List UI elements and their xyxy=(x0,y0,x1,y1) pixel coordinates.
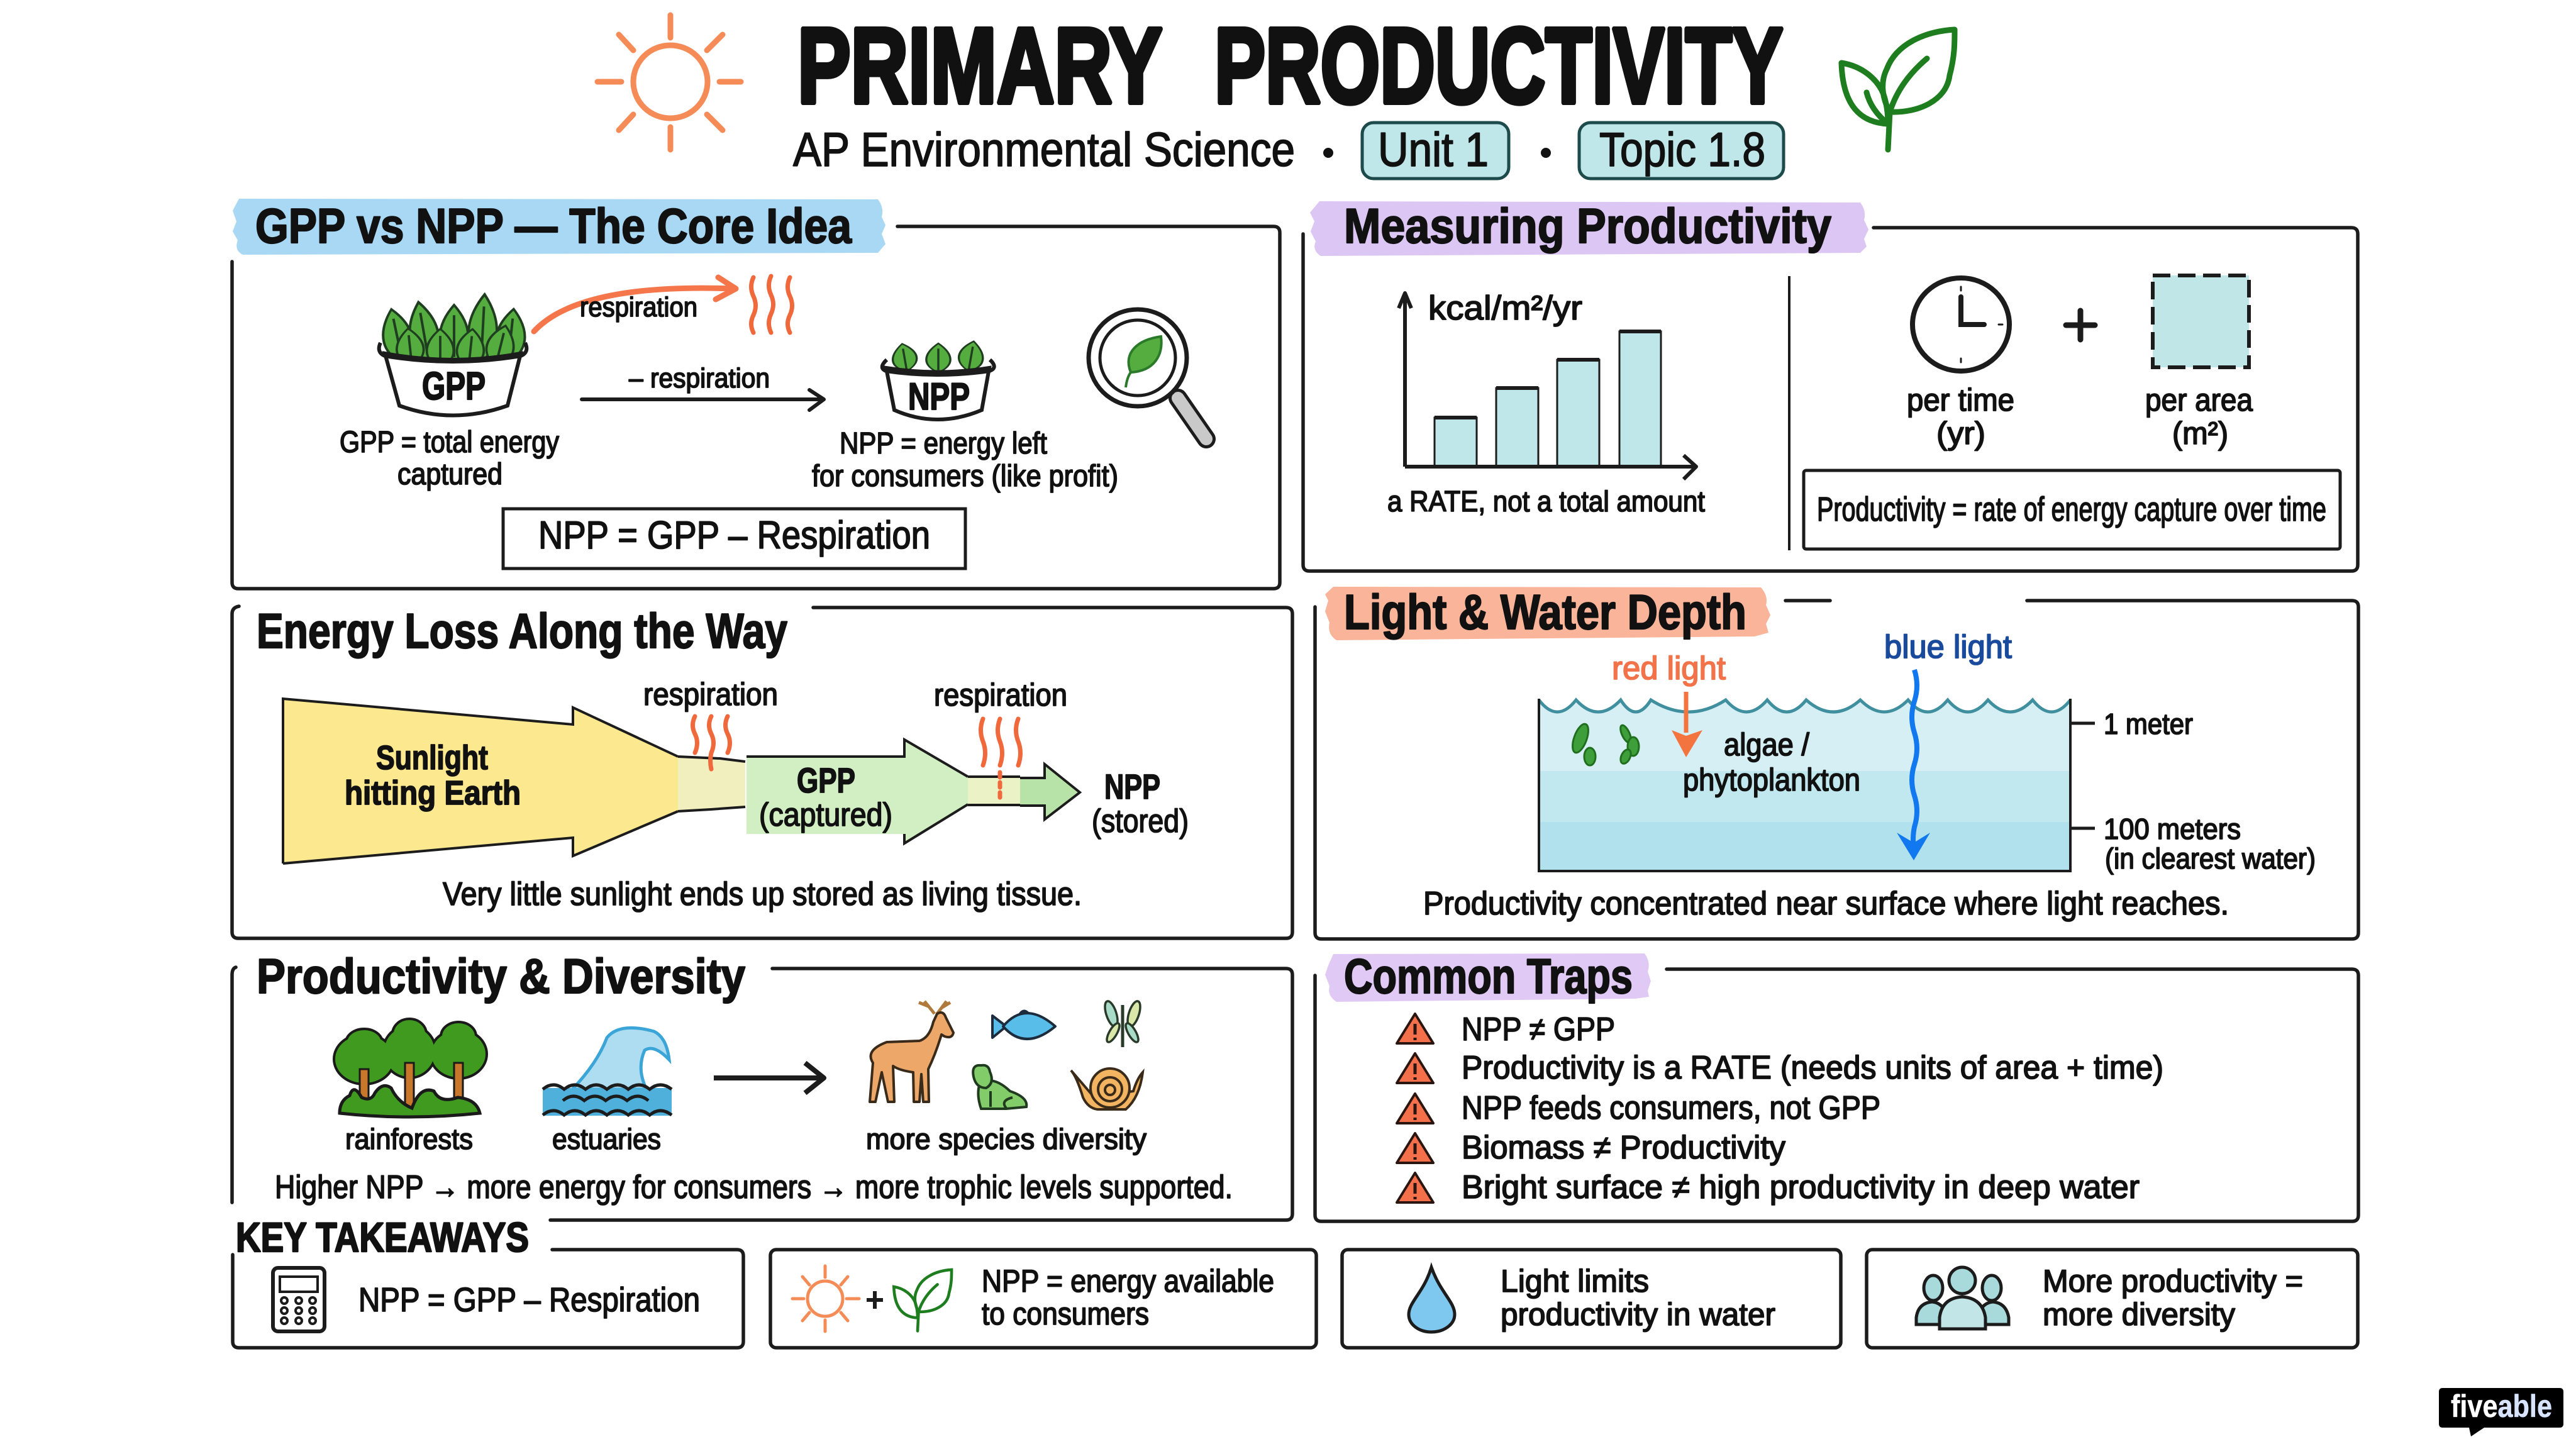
label: species diversity: more species diversity xyxy=(866,1123,1146,1155)
caption: energy loss: Very little sunlight ends up stored as living tissue. xyxy=(443,876,1082,913)
label: per area xyxy=(2145,382,2253,451)
definition box xyxy=(1804,470,2340,549)
arrow: GPP xyxy=(747,740,968,843)
arrow: sunlight xyxy=(283,699,678,863)
flow diagram xyxy=(283,677,1189,863)
label: sunlight: hitting Earth xyxy=(345,774,521,812)
icon: GPP bucket: GPP xyxy=(422,365,486,408)
card: diversity: more diversity xyxy=(2043,1297,2235,1332)
arrow: respiration loss xyxy=(534,277,736,331)
icon: clock xyxy=(1913,278,2009,371)
icon: heat squiggles xyxy=(751,276,792,333)
squiggles: respiration one xyxy=(693,716,730,769)
depth scale xyxy=(2070,708,2316,875)
connector: sunlight to GPP xyxy=(678,757,745,811)
depth scale: 1 meter xyxy=(2104,708,2193,740)
water diagram xyxy=(1539,670,2070,871)
icon: people xyxy=(1916,1267,2009,1329)
icon: algae xyxy=(1569,722,1639,765)
panel: GPP vs NPP xyxy=(232,198,1280,589)
icon: frog xyxy=(973,1065,1026,1109)
bullet xyxy=(1541,148,1551,158)
panel: common traps xyxy=(1315,948,2358,1221)
depth scale: 100 meters xyxy=(2104,813,2241,845)
card: diversity: More productivity = xyxy=(2043,1263,2303,1299)
caption: rate: a RATE, not a total amount xyxy=(1387,485,1705,518)
badge: topic 1.8: Topic 1.8 xyxy=(1599,123,1765,177)
label: estuaries: estuaries xyxy=(552,1123,661,1155)
card: formula xyxy=(233,1250,743,1348)
arrow: NPP xyxy=(1020,764,1080,819)
card: light limits: productivity in water xyxy=(1501,1297,1775,1332)
icon: dragonfly xyxy=(1102,1000,1143,1047)
trap three: NPP feeds consumers, not GPP xyxy=(1462,1090,1880,1126)
label: rainforests: rainforests xyxy=(345,1123,473,1155)
icon: GPP bucket xyxy=(377,294,528,415)
label: blue light: blue light xyxy=(1884,629,2012,665)
icon: deer xyxy=(870,1001,953,1102)
label: respiration two: respiration xyxy=(934,677,1067,713)
text: GPP definition: captured xyxy=(397,458,502,491)
heading: light and water depth: Light & Water Depth xyxy=(1344,584,1746,640)
label: NPP stored xyxy=(1092,767,1189,840)
label: red light: red light xyxy=(1612,650,1726,687)
text: GPP definition xyxy=(340,426,559,491)
label: NPP stored: (stored) xyxy=(1092,803,1189,840)
bullet xyxy=(1323,148,1333,158)
icon: NPP bucket: NPP xyxy=(908,375,970,418)
label: GPP captured: (captured) xyxy=(759,797,892,833)
icon: rainforest trees xyxy=(335,1020,486,1117)
bar chart xyxy=(1399,289,1696,479)
panel: energy loss xyxy=(232,603,1292,938)
icon: leaf xyxy=(1841,30,1955,150)
label: minus respiration: – respiration xyxy=(629,363,770,394)
icon: small sun xyxy=(792,1266,859,1331)
depth scale: (in clearest water) xyxy=(2105,842,2316,875)
icon: fish xyxy=(992,1011,1055,1039)
label: per time xyxy=(1907,382,2014,451)
logo: fiveable: fiveable xyxy=(2451,1389,2552,1424)
label: GPP captured: GPP xyxy=(797,760,855,800)
text: NPP definition: for consumers (like profit) xyxy=(812,460,1118,493)
trap five: Bright surface ≠ high productivity in deep water xyxy=(1462,1169,2140,1206)
heading: GPP vs NPP: GPP vs NPP — The Core Idea xyxy=(255,198,852,253)
card: energy to consumers: NPP = energy available xyxy=(982,1263,1274,1299)
plus sign xyxy=(2066,311,2095,340)
card: light limits: Light limits xyxy=(1501,1263,1649,1299)
icon: snail xyxy=(1071,1069,1143,1109)
card: light limits xyxy=(1342,1250,1841,1348)
label: per area: per area xyxy=(2145,382,2253,418)
label: algae: phytoplankton xyxy=(1683,762,1860,797)
squiggles: respiration two xyxy=(981,719,1020,801)
icon: sun xyxy=(597,15,741,150)
subtitle: AP Environmental Science xyxy=(793,123,1295,177)
panel: productivity and diversity xyxy=(232,948,1292,1220)
label: per time: (yr) xyxy=(1936,416,1985,451)
label: GPP captured xyxy=(759,760,892,833)
formula box xyxy=(503,509,965,569)
icon: small leaf xyxy=(894,1270,952,1331)
card: diversity xyxy=(1867,1250,2358,1348)
caption: diversity: Higher NPP → more energy for consumers → more trophic levels supported. xyxy=(275,1169,1233,1206)
card: formula: NPP = GPP – Respiration xyxy=(358,1281,700,1319)
text: GPP definition: GPP = total energy xyxy=(340,426,559,459)
label: respiration one: respiration xyxy=(643,677,778,712)
panel: light and water depth xyxy=(1315,584,2358,939)
caption: light: Productivity concentrated near surface where light reaches. xyxy=(1423,886,2229,922)
trap one: NPP ≠ GPP xyxy=(1462,1011,1615,1048)
trap two: Productivity is a RATE (needs units of area + time) xyxy=(1462,1050,2163,1086)
formula box: NPP = GPP – Respiration xyxy=(538,514,930,557)
heading: productivity and diversity: Productivity & Diversity xyxy=(257,948,745,1004)
key takeaways xyxy=(233,1214,2358,1348)
label: sunlight xyxy=(345,739,521,812)
title xyxy=(797,6,1783,126)
text: NPP definition xyxy=(812,427,1118,493)
icon: magnifier with leaf xyxy=(1089,309,1206,439)
label: per time: per time xyxy=(1907,382,2014,418)
text: NPP definition: NPP = energy left xyxy=(840,427,1047,460)
label: algae xyxy=(1683,727,1860,797)
trap list xyxy=(1397,1011,2163,1206)
logo: fiveable xyxy=(2439,1388,2563,1436)
label: per area: (m²) xyxy=(2172,416,2228,451)
heading: key takeaways: KEY TAKEAWAYS xyxy=(236,1214,529,1260)
label: NPP stored: NPP xyxy=(1104,767,1160,806)
panel: measuring productivity xyxy=(1303,198,2358,571)
icon: estuary wave xyxy=(543,1028,672,1116)
badge: unit 1: Unit 1 xyxy=(1378,123,1489,177)
arrow: blue light xyxy=(1897,670,1930,860)
header xyxy=(597,6,1955,179)
trap one xyxy=(1397,1011,1615,1048)
trap four: Biomass ≠ Productivity xyxy=(1462,1130,1785,1166)
heading: energy loss: Energy Loss Along the Way xyxy=(257,603,787,658)
icon: NPP bucket xyxy=(882,339,994,419)
card: energy to consumers xyxy=(770,1250,1316,1348)
icon: water drop xyxy=(1409,1267,1455,1332)
bar chart: kcal/m²/yr xyxy=(1428,289,1582,327)
icon: calculator xyxy=(273,1268,325,1331)
label: respiration: respiration xyxy=(580,292,697,323)
icon: dashed area square xyxy=(2153,275,2249,367)
plus sign xyxy=(867,1291,883,1309)
arrow: red light xyxy=(1672,692,1702,757)
title: PRODUCTIVITY xyxy=(1214,6,1783,126)
label: algae: algae / xyxy=(1724,727,1809,762)
title: PRIMARY xyxy=(797,6,1162,126)
arrow: leads to diversity xyxy=(714,1063,824,1093)
connector: GPP to NPP xyxy=(968,777,1020,805)
arrow: GPP to NPP xyxy=(582,390,824,410)
heading: common traps: Common Traps xyxy=(1344,948,1633,1004)
heading: measuring productivity: Measuring Productivity xyxy=(1344,198,1831,253)
card: energy to consumers: to consumers xyxy=(982,1296,1149,1331)
definition box: Productivity = rate of energy capture over time xyxy=(1817,491,2326,528)
label: sunlight: Sunlight xyxy=(376,739,488,777)
